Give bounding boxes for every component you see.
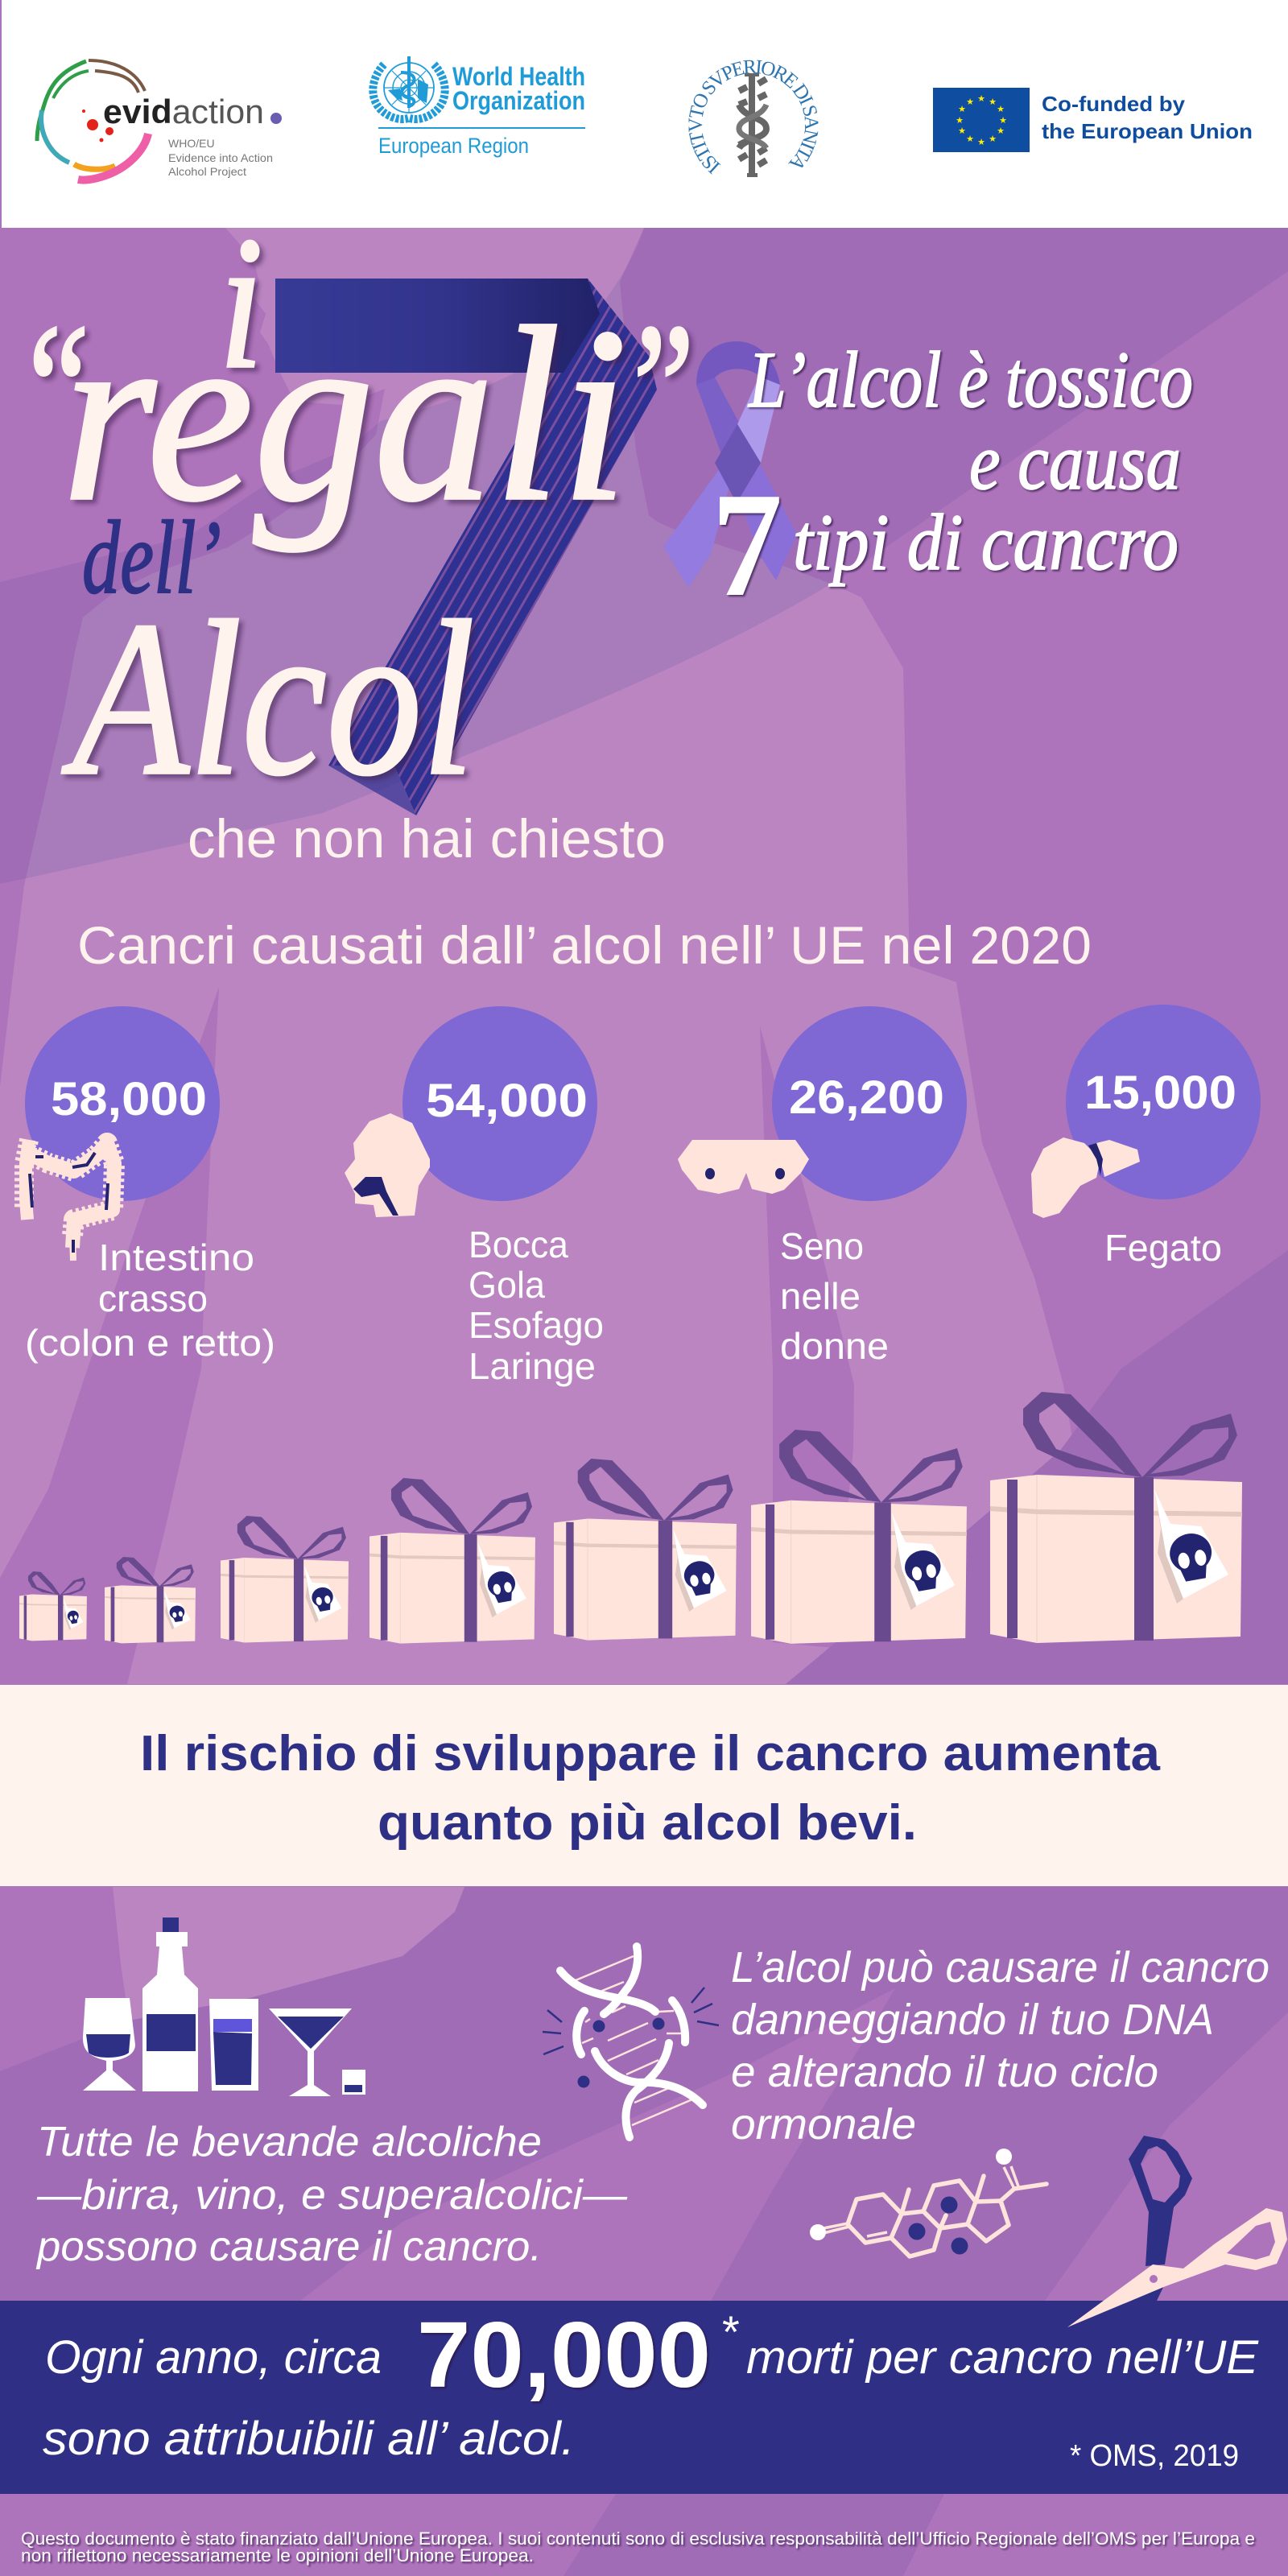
text: DNA damage: danneggiando il tuo DNA — [731, 1996, 1214, 2044]
stat: breast: donne — [780, 1325, 889, 1367]
icon: awareness ribbon — [663, 341, 797, 588]
message band: risk — [0, 1685, 1288, 1886]
title: regali — [62, 277, 628, 553]
logo: EU co-funded: ★ — [966, 134, 974, 144]
header logo band — [0, 0, 1253, 228]
icon: large intestine — [24, 1140, 114, 1261]
tagline: tipi di cancro — [793, 497, 1179, 587]
stat: colon: (colon e retto) — [25, 1322, 275, 1364]
stat: colon: crasso — [98, 1278, 208, 1319]
logo: EU co-funded: ★ — [997, 105, 1005, 114]
text: DNA damage — [731, 1943, 1269, 2149]
text: all alcoholic drinks: Tutte le bevande alcoliche — [37, 2119, 542, 2165]
title: dell': dell’ — [82, 500, 221, 616]
heading: cancers caused: Cancri causati dall’ alcol nell’ UE nel 2020 — [77, 915, 1092, 975]
stat: mouth and throat: 54,000 — [426, 1075, 588, 1127]
logo: EU co-funded: the European Union — [1042, 119, 1253, 143]
stat: mouth and throat: Laringe — [469, 1345, 596, 1387]
logo: EU co-funded: ★ — [989, 134, 997, 144]
stat: liver: Fegato — [1104, 1227, 1222, 1269]
logo: EU co-funded: Co-funded by — [1042, 92, 1186, 116]
stat: liver — [1031, 1005, 1261, 1269]
gift 5 — [554, 1459, 737, 1641]
footer disclaimer: non riflettono necessariamente le opinioni dell’Unione Europea. — [21, 2545, 534, 2566]
deaths band: 70,000 — [417, 2302, 711, 2407]
stat: breast: 26,200 — [789, 1071, 944, 1124]
tagline — [712, 335, 1193, 628]
icon: breasts — [678, 1140, 809, 1194]
logo: EU co-funded: ★ — [977, 138, 985, 147]
logo: Istituto Superiore di Sanità: ISTITVTO SVPERIORE DI SANITA — [689, 60, 818, 175]
title: Alcol — [60, 576, 475, 821]
logo: EU co-funded: ★ — [958, 126, 966, 136]
deaths band: Ogni anno, circa — [45, 2331, 382, 2384]
message band: risk: Il rischio di sviluppare il cancro aumenta — [140, 1726, 1161, 1781]
stat: mouth and throat: Gola — [469, 1264, 545, 1306]
title: ” — [618, 286, 695, 491]
logo: EU co-funded: ★ — [989, 97, 997, 107]
icon: liver — [1031, 1137, 1140, 1218]
text: all alcoholic drinks: —birra, vino, e superalcolici— — [36, 2172, 628, 2219]
text: all alcoholic drinks — [35, 2119, 628, 2270]
gift 4 — [369, 1478, 535, 1644]
logo: WHO: European Region — [378, 134, 529, 158]
deaths band: * — [722, 2306, 740, 2357]
logo: evidaction — [37, 60, 282, 180]
deaths band: * OMS, 2019 — [1070, 2439, 1239, 2473]
title: “ — [14, 286, 91, 491]
logo: EU co-funded: ★ — [977, 94, 985, 104]
stat: liver: 15,000 — [1084, 1067, 1236, 1119]
gift 3 — [221, 1516, 349, 1643]
gift 7 — [990, 1392, 1242, 1643]
gift 6 — [751, 1430, 967, 1644]
tagline: e causa — [969, 417, 1181, 506]
message band: risk: quanto più alcol bevi. — [378, 1795, 917, 1851]
gift 2 — [105, 1557, 196, 1643]
text: all alcoholic drinks: possono causare il cancro. — [35, 2223, 542, 2270]
icon: head profile — [345, 1113, 430, 1217]
stat: breast — [678, 1006, 967, 1367]
text: DNA damage: ormonale — [731, 2100, 916, 2149]
logo: EU co-funded: ★ — [956, 116, 964, 126]
stat: mouth and throat: Bocca — [469, 1224, 568, 1265]
stat: mouth and throat — [345, 1006, 604, 1387]
footer disclaimer: Questo documento è stato finanziato dall’Unione Europea. I suoi contenuti sono di esclusiva responsabilità dell’Ufficio Regionale dell’OMS per l’Europa e — [21, 2529, 1255, 2549]
text: DNA damage: L’alcol può causare il cancro — [731, 1943, 1269, 1992]
tagline: 7 — [712, 462, 782, 628]
logo: evidaction: WHO/EU — [168, 137, 215, 150]
icon: scissors — [1067, 2136, 1287, 2327]
icon: DNA helix — [543, 1946, 719, 2137]
logo: evidaction: Alcohol Project — [168, 165, 246, 178]
text: DNA damage: e alterando il tuo ciclo — [731, 2048, 1158, 2096]
logo: EU co-funded: ★ — [999, 116, 1007, 126]
stat: colon — [24, 1006, 275, 1364]
logo: evidaction: evidaction — [103, 93, 264, 130]
stat: mouth and throat: Esofago — [469, 1304, 604, 1346]
deaths band — [0, 2301, 1288, 2494]
icon: hormone molecule — [810, 2149, 1046, 2256]
title — [14, 198, 695, 821]
deaths band: morti per cancro nell’UE — [746, 2331, 1259, 2384]
big striped number 7 — [275, 279, 657, 815]
stat: colon: 58,000 — [51, 1073, 207, 1125]
logo: WHO: Organization — [452, 86, 585, 115]
gifts row — [19, 1392, 1242, 1644]
tagline: L’alcol è tossico — [747, 335, 1193, 424]
logo: WHO — [373, 56, 585, 158]
stat: breast: Seno — [780, 1225, 864, 1267]
stat: colon: Intestino — [98, 1236, 254, 1278]
subtitle: che non hai chiesto — [188, 808, 666, 869]
logo: WHO: World Health — [452, 62, 585, 91]
title: i — [219, 198, 263, 407]
logo: EU co-funded: ★ — [966, 97, 974, 107]
deaths band: sono attribuibili all’ alcol. — [43, 2413, 575, 2465]
icon: alcoholic drinks — [83, 1918, 365, 2096]
stat: breast: nelle — [780, 1275, 861, 1317]
footer disclaimer — [21, 2529, 1255, 2566]
logo: EU co-funded: ★ — [997, 126, 1005, 136]
gift 1 — [19, 1571, 87, 1641]
logo: EU co-funded: ★ — [958, 105, 966, 114]
logo: EU co-funded — [933, 88, 1253, 152]
logo: evidaction: Evidence into Action — [168, 151, 273, 164]
